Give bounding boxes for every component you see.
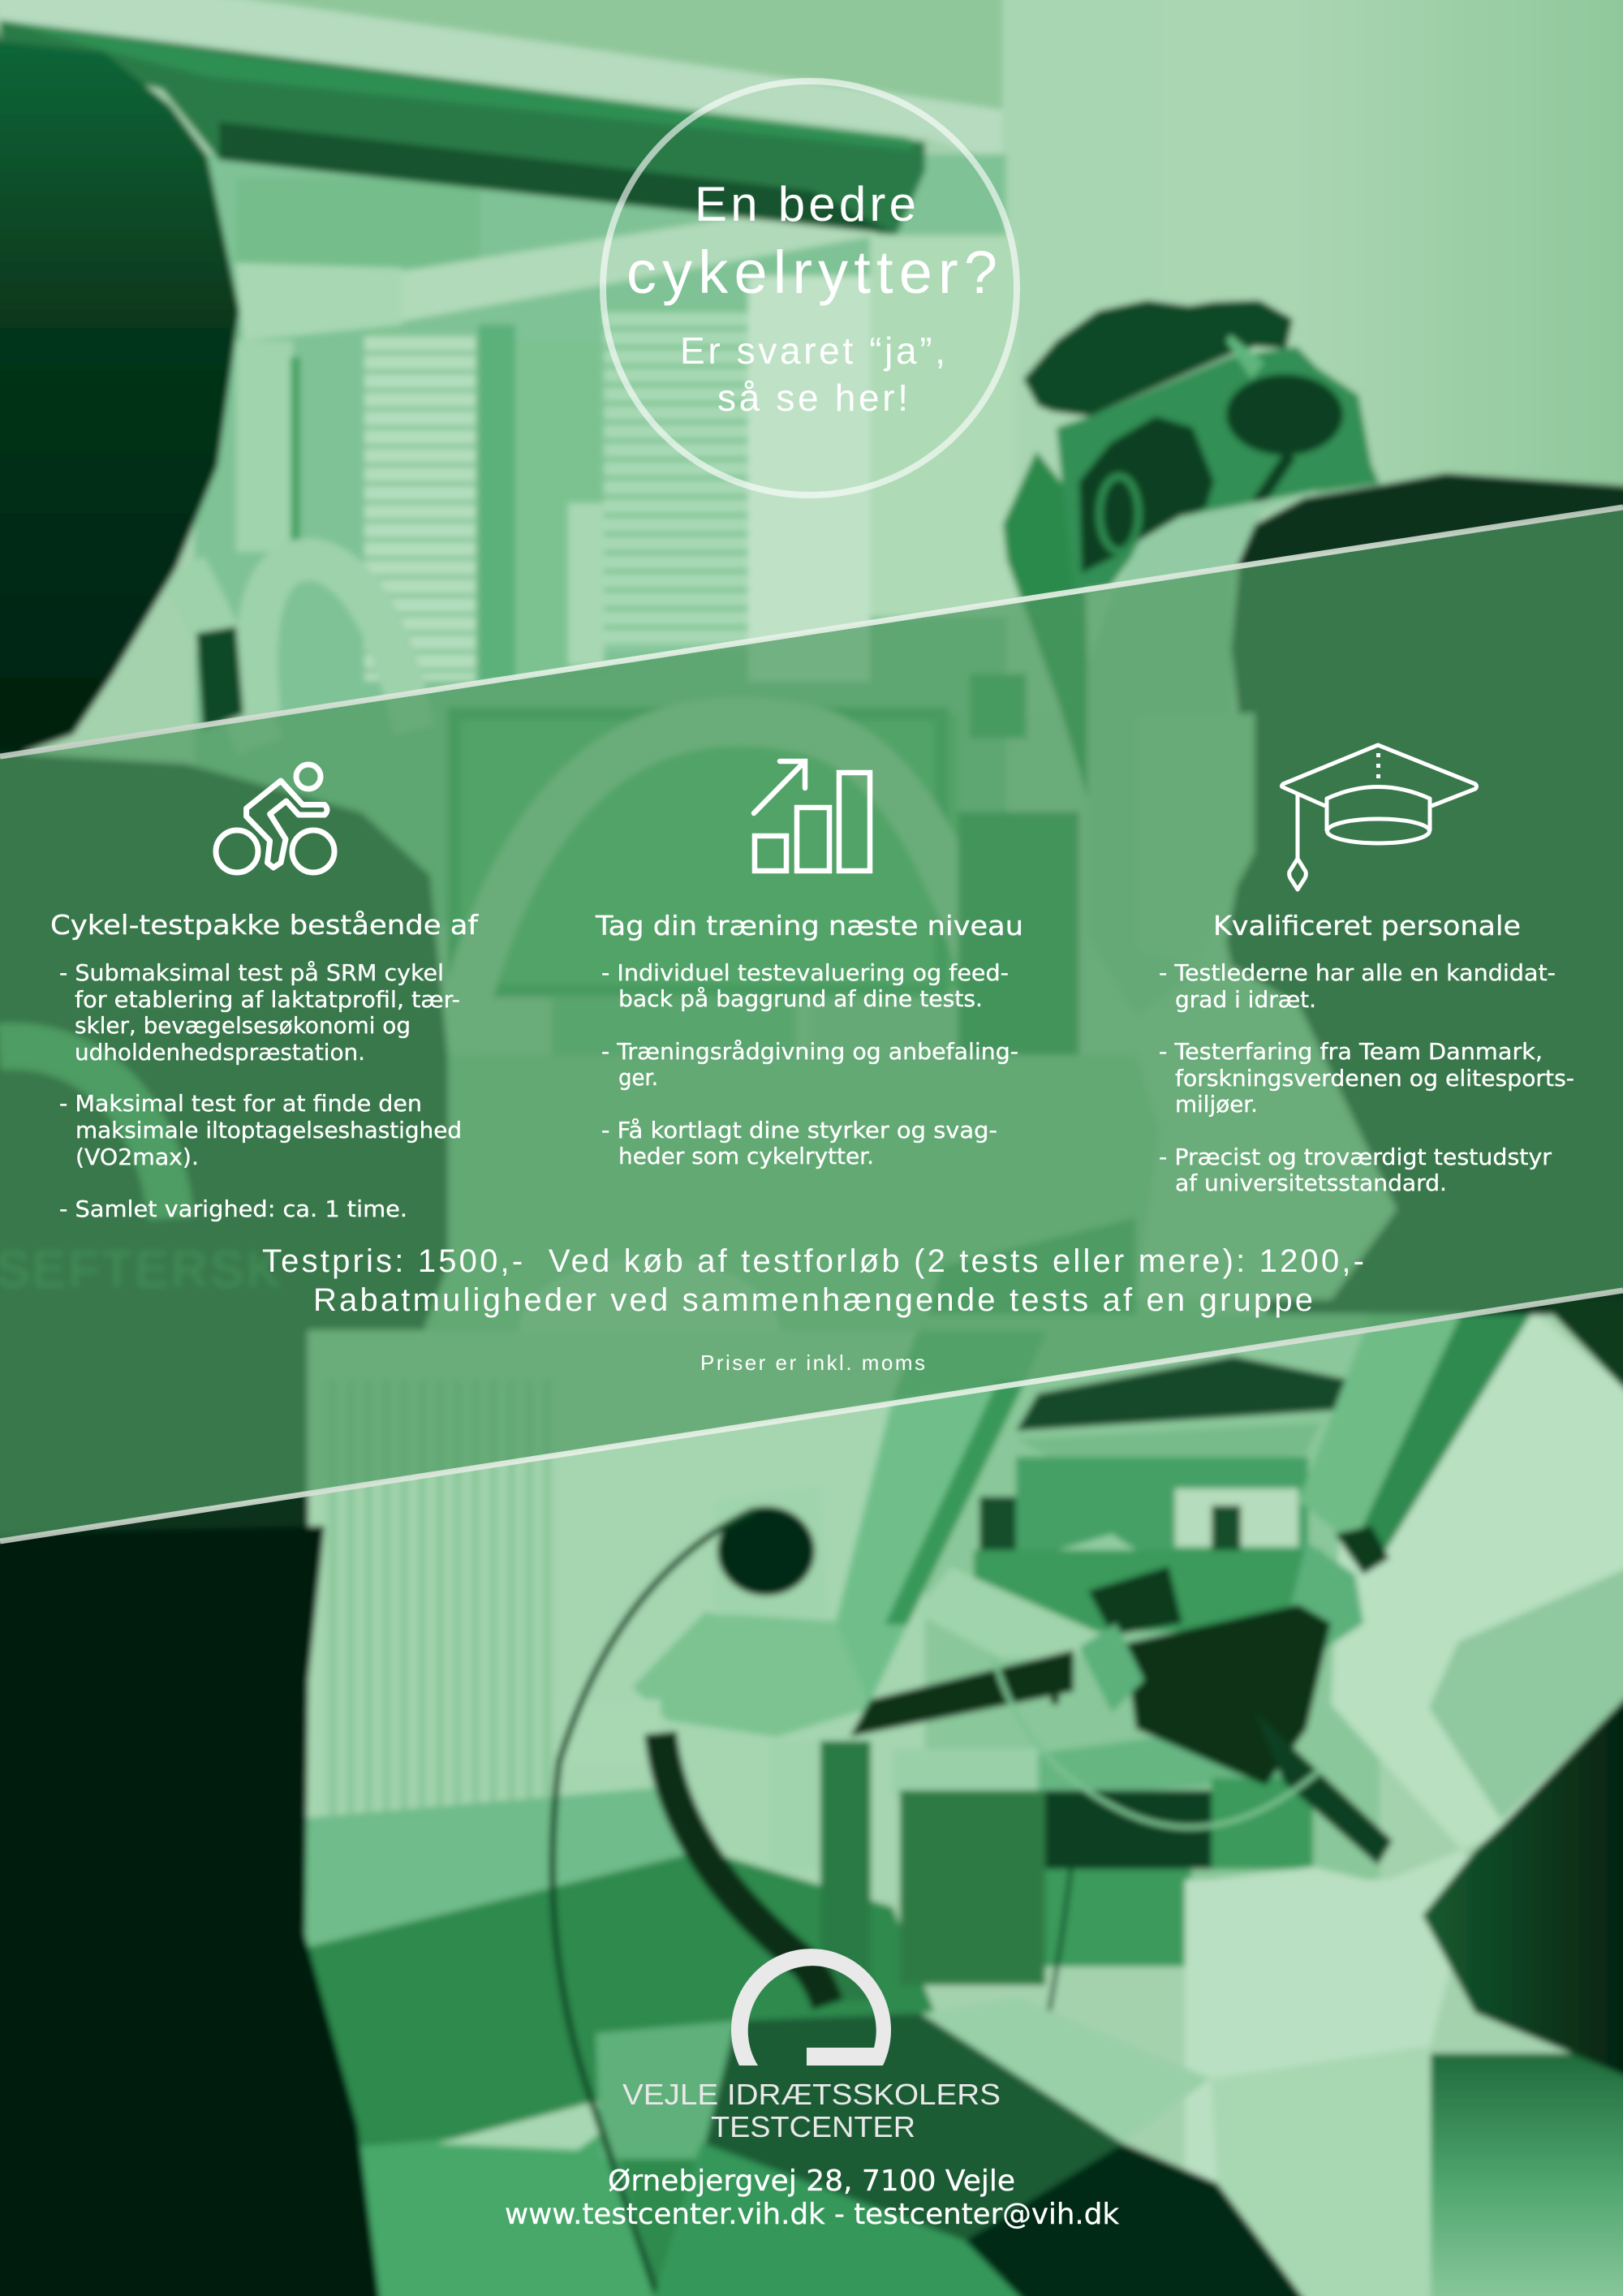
- heading: kvalificeret personale: Kvalificeret personale: [1213, 910, 1521, 941]
- pricing text: [262, 1243, 1364, 1375]
- list: staff qualifications: af universitetsstandard.: [1175, 1170, 1447, 1196]
- list: test contents: - Submaksimal test på SRM cykel: [59, 959, 444, 986]
- logo: Vejle Idrætsskolers Testcenter: VEJLE IDRÆTSSKOLERS: [622, 2078, 1001, 2111]
- contact details: www.testcenter.vih.dk - testcenter@vih.dk: [505, 2198, 1119, 2231]
- heading line: cykelrytter: cykelrytter?: [626, 239, 997, 306]
- heading line: En bedre: En bedre: [695, 177, 916, 231]
- rider arms and hand: [893, 1331, 1047, 1398]
- list: staff qualifications: - Testerfaring fra Team Danmark,: [1159, 1038, 1543, 1065]
- list: staff qualifications: - Testlederne har alle en kandidat-: [1159, 959, 1556, 986]
- list: training benefits: back på baggrund af dine tests.: [618, 985, 983, 1012]
- shirt and shoulder: [1087, 489, 1322, 1014]
- logo: Vejle Idrætsskolers Testcenter: [622, 1949, 1001, 2143]
- logo: Vejle Idrætsskolers Testcenter: TESTCENTER: [711, 2110, 915, 2143]
- band photo parts: [454, 714, 958, 990]
- list: training benefits: - Individuel testevaluering og feed-: [601, 959, 1009, 986]
- bench and floor: [921, 1997, 1211, 2143]
- list: test contents: maksimale iltoptagelseshastighed: [75, 1117, 462, 1144]
- list: test contents: - Maksimal test for at finde den: [59, 1090, 422, 1117]
- contact details: [505, 2165, 1119, 2231]
- right body and saddle: [1185, 1315, 1623, 2045]
- list: test contents: (VO2max).: [75, 1144, 199, 1170]
- list: staff qualifications: forskningsverdenen og elitesports-: [1175, 1065, 1574, 1092]
- list: test contents: udholdenhedspræstation.: [75, 1039, 365, 1066]
- lower wall and radiator: [308, 1331, 925, 1899]
- pricing text: Testpris: 1500,- Ved køb af testforløb (2 tests eller mere): 1200,-: [262, 1243, 1364, 1279]
- roller blind: [0, 20, 925, 235]
- list: test contents: - Samlet varighed: ca. 1 time.: [59, 1195, 407, 1222]
- heading: næste niveau: Tag din træning næste niveau: [595, 910, 1023, 941]
- background photo: cyclist in test lab: SEFTERSK: [0, 1242, 280, 1298]
- contact details: Ørnebjergvej 28, 7100 Vejle: [608, 2165, 1015, 2198]
- icon: graduation cap: [1282, 745, 1477, 890]
- icon: cyclist: [216, 765, 334, 872]
- wheel and cables: [661, 1733, 828, 2005]
- headline circle: [603, 81, 1017, 495]
- cyclist head: [1003, 451, 1091, 812]
- list: test contents: for etablering af laktatprofil, tær-: [75, 986, 460, 1013]
- column: kvalificeret personale: [1159, 745, 1574, 1196]
- viewer body: [0, 1526, 381, 2296]
- column: næste niveau: [595, 761, 1023, 1170]
- list: training benefits: - Få kortlagt dine styrker og svag-: [601, 1117, 997, 1144]
- handlebar and lever: [850, 1650, 1074, 1737]
- list: training benefits: [601, 959, 1018, 1170]
- subheading: så se her!: [717, 377, 908, 419]
- list: staff qualifications: miljøer.: [1175, 1091, 1258, 1118]
- icon: rising bar chart: [754, 761, 870, 871]
- list: staff qualifications: - Præcist og troværdigt testudstyr: [1159, 1144, 1552, 1170]
- green diagonal band: [0, 507, 1623, 1541]
- list: test contents: [59, 959, 462, 1222]
- list: training benefits: ger.: [618, 1064, 658, 1091]
- viewer head: [0, 0, 239, 767]
- list: training benefits: heder som cykelrytter.: [618, 1143, 874, 1170]
- desk, keyboard, equipment: [925, 1315, 1380, 1899]
- subheading: [680, 330, 945, 419]
- pricing text: Rabatmuligheder ved sammenhængende tests af en gruppe: [313, 1282, 1313, 1318]
- machine tube behind: [256, 560, 414, 730]
- heading: cykel-testpakke: Cykel-testpakke bestående af: [50, 909, 479, 941]
- window: [195, 154, 1006, 925]
- list: training benefits: - Træningsrådgivning og anbefaling-: [601, 1038, 1018, 1065]
- column: cykel-testpakke: [50, 765, 479, 1222]
- band edge lines: [0, 507, 1623, 1541]
- subheading: Er svaret “ja”,: [680, 330, 945, 372]
- right leg dark: [1423, 1684, 1623, 2082]
- list: staff qualifications: grad i idræt.: [1175, 986, 1316, 1013]
- pricing text: Priser er inkl. moms: [700, 1350, 925, 1375]
- list: staff qualifications: [1159, 959, 1574, 1196]
- list: test contents: skler, bevægelsesøkonomi og: [75, 1012, 411, 1039]
